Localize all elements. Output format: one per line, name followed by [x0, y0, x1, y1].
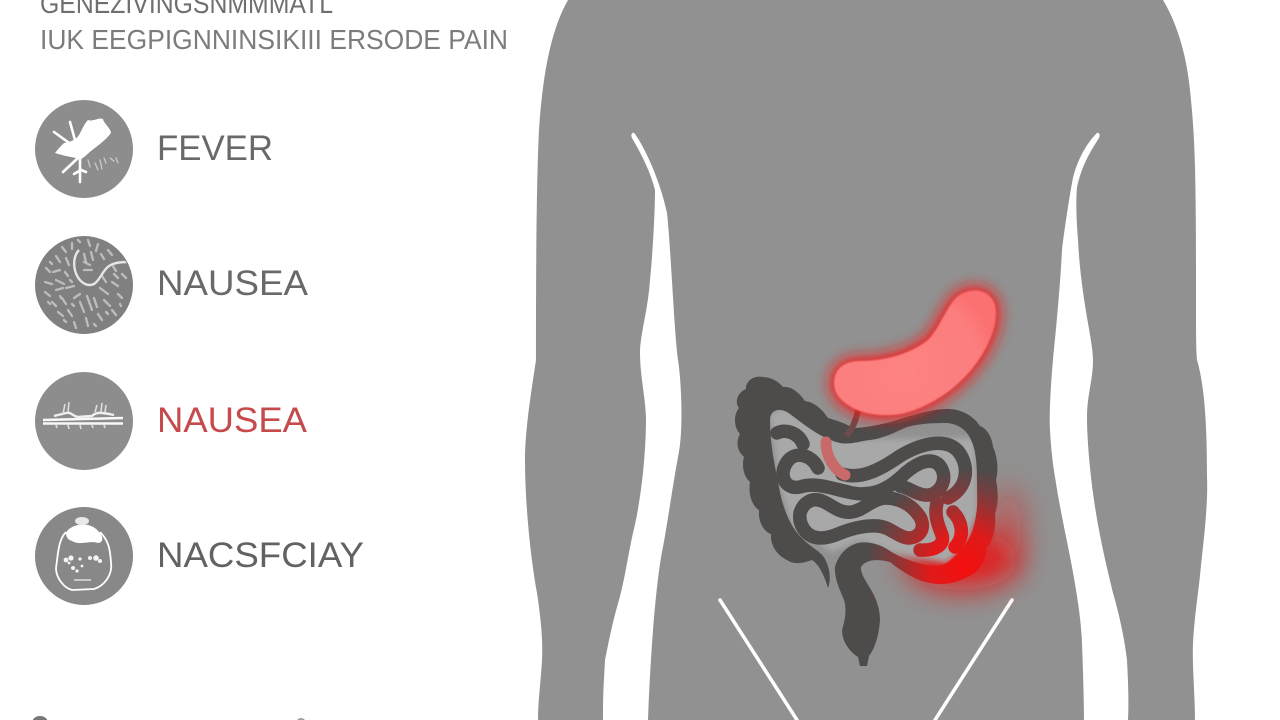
- torso and arms: [525, 0, 1207, 720]
- large intestine: [735, 377, 998, 666]
- digestive system: [735, 290, 1022, 666]
- label: nausea: NAUSEA: [157, 264, 309, 303]
- stomach: [834, 290, 996, 415]
- stomach connector: [846, 410, 858, 436]
- symptom: nausea highlighted: [35, 372, 308, 470]
- left groin line: [720, 600, 797, 720]
- symptom: nacsfciay: [35, 507, 364, 605]
- cropped icons at bottom edge: [32, 716, 305, 720]
- small intestine loops: [777, 431, 965, 550]
- body silhouette: [525, 0, 1207, 720]
- symptom: nausea textured: [35, 236, 309, 334]
- symptom: fever: [35, 100, 273, 198]
- icon: face: [35, 507, 133, 605]
- stomach glow: [834, 290, 996, 415]
- icon: horizontal band: [35, 372, 133, 470]
- right groin line: [935, 600, 1012, 720]
- duodenum pink section: [826, 442, 845, 475]
- label: fever: FEVER: [157, 129, 273, 168]
- heading line 2: IUK EEGPIGNNINSIKIII ERSODE PAIN: [40, 24, 508, 55]
- label: nacsfciay: NACSFCIAY: [157, 536, 364, 575]
- right arm gap: [1050, 133, 1128, 720]
- small intestine background: [770, 408, 977, 563]
- icon: fever burst: [35, 100, 133, 198]
- icon: textured circle: [35, 236, 133, 334]
- lower abdomen glow: [906, 488, 1022, 590]
- label: nausea red: NAUSEA: [157, 401, 308, 440]
- left arm gap: [603, 133, 681, 720]
- heading text: [40, 0, 508, 55]
